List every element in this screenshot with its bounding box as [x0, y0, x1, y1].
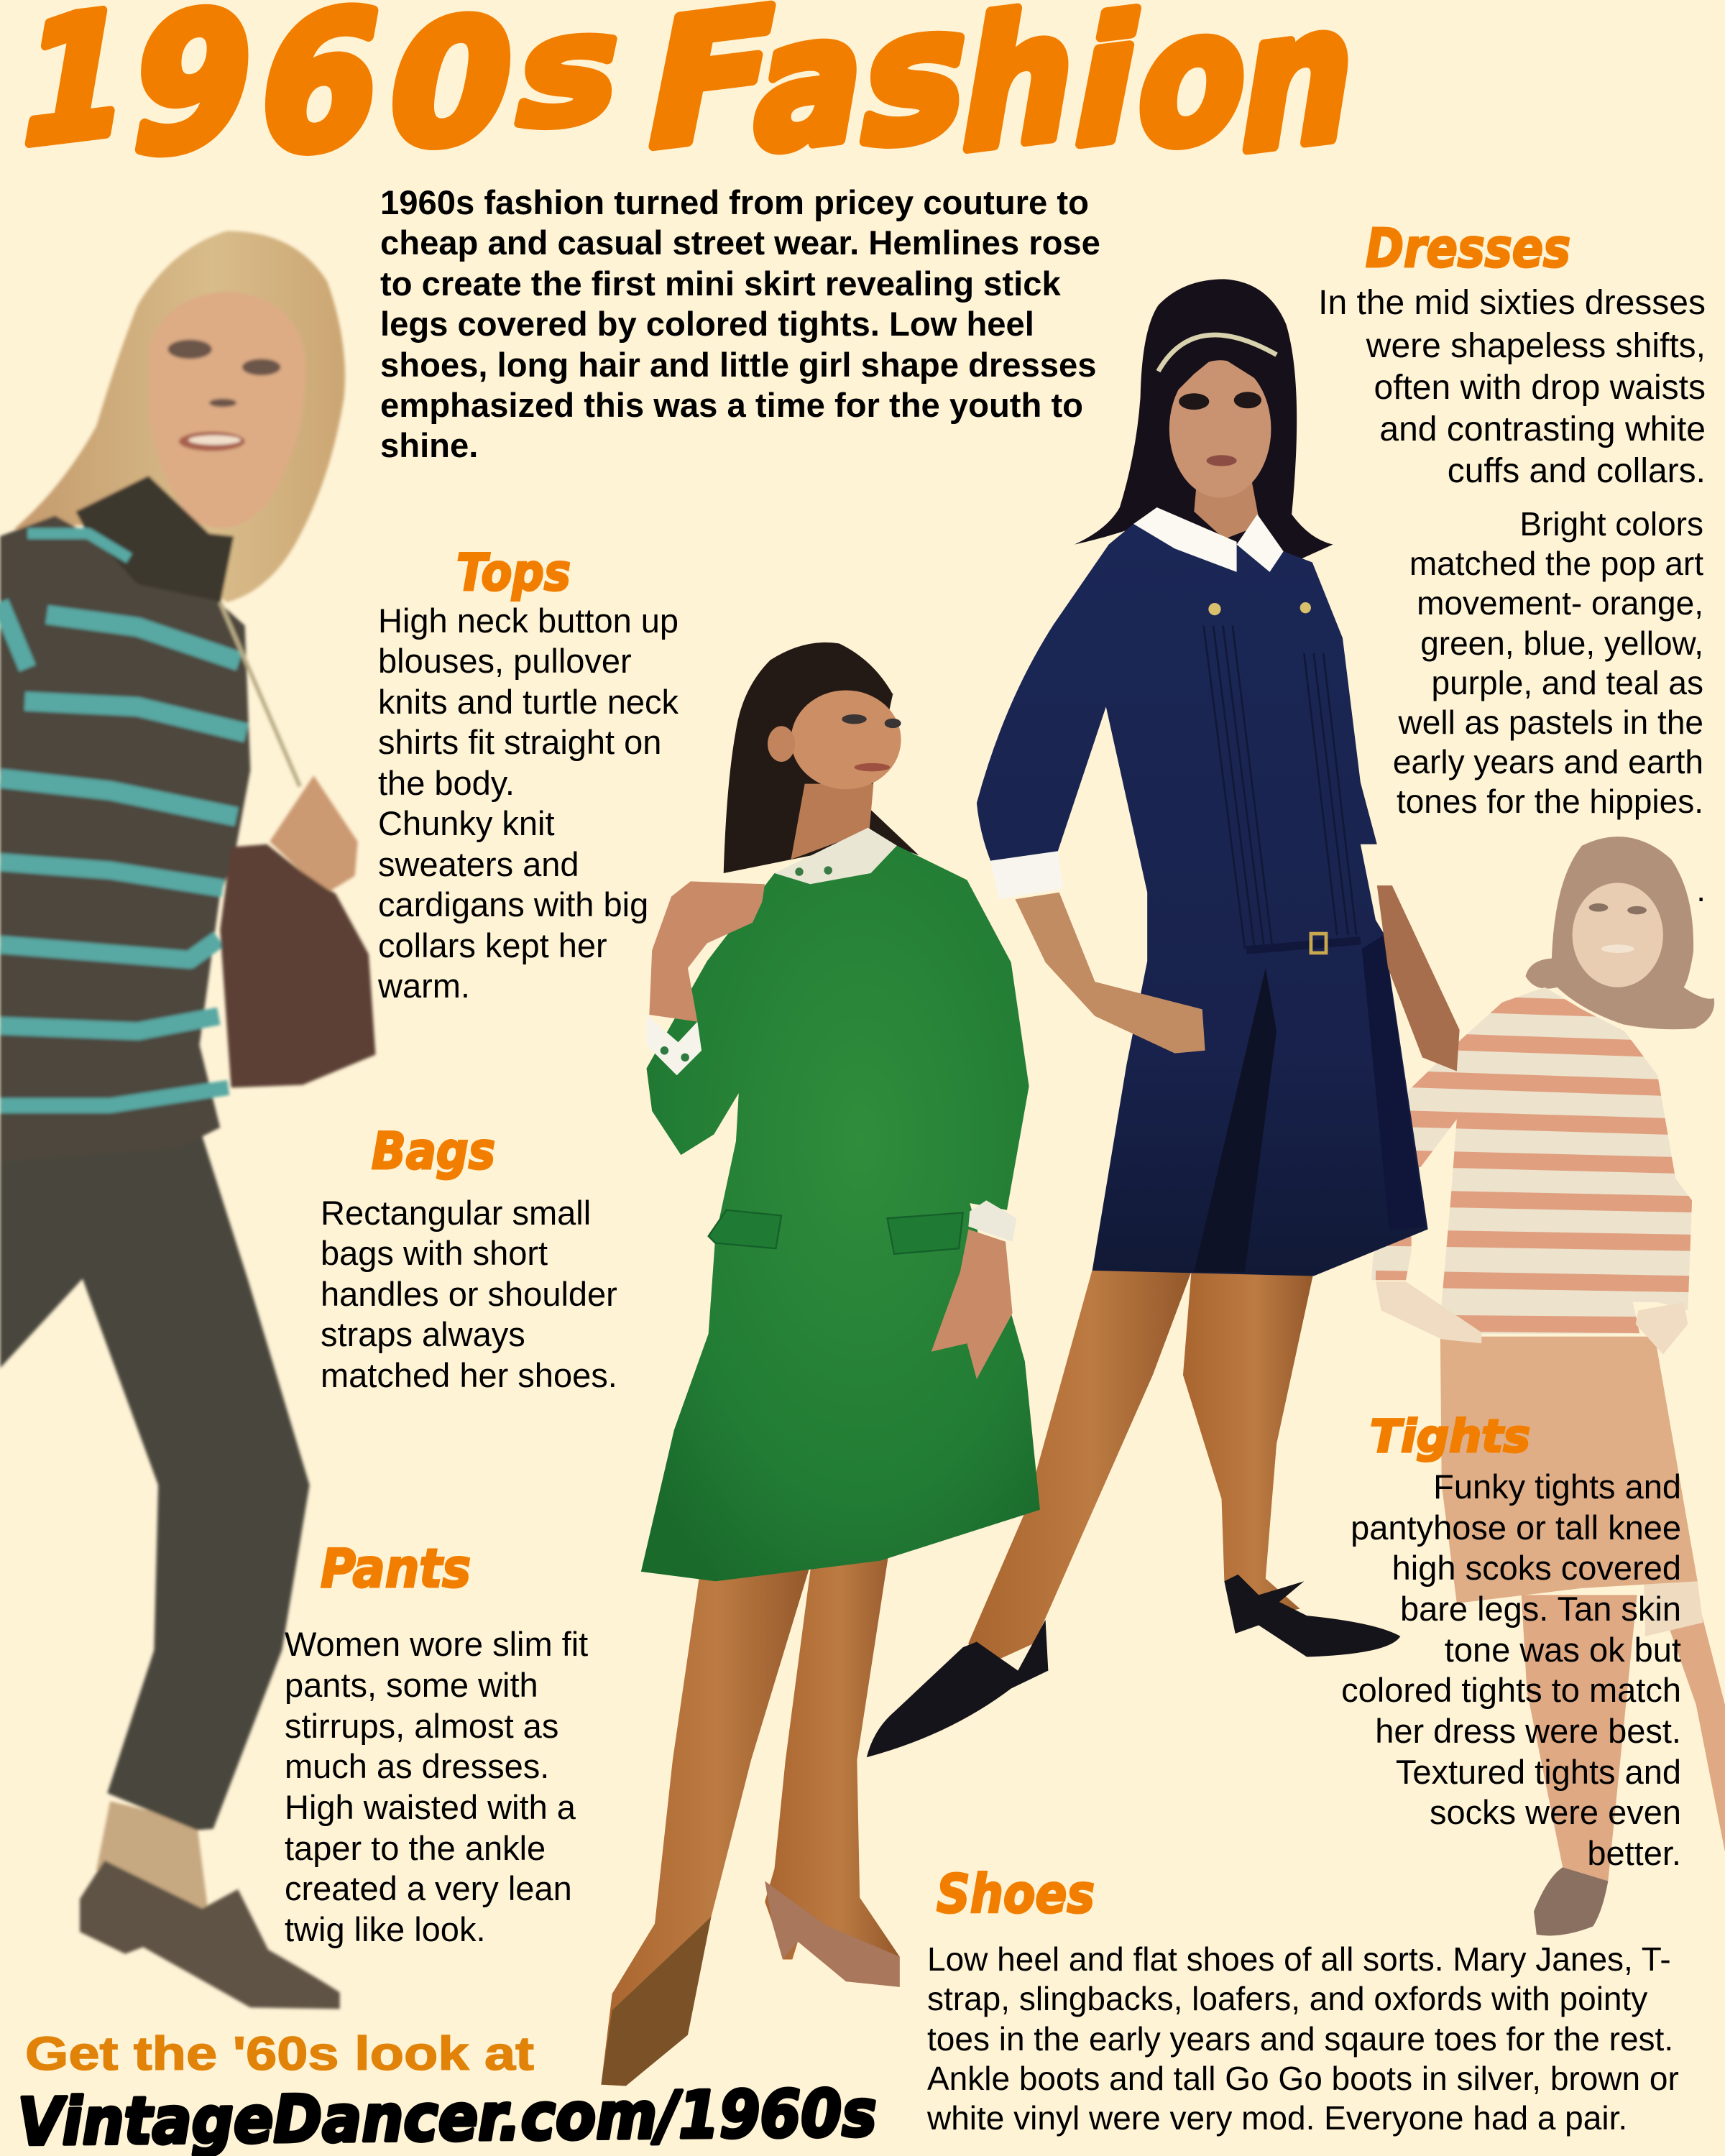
eyes, mouth	[842, 714, 901, 728]
legs	[1522, 1595, 1725, 1881]
heading: Pants: Pants	[321, 1538, 471, 1600]
hand	[270, 775, 358, 891]
face	[149, 292, 305, 528]
right cuff	[968, 1200, 1016, 1242]
text: Pants: pants, some with	[285, 1666, 538, 1704]
intro text: 1960s fashion turned from pricey couture to	[380, 184, 1089, 222]
collar	[1133, 507, 1284, 572]
dress	[977, 524, 1428, 1276]
text: Tights: Funky tights and	[1433, 1468, 1681, 1506]
heading: Dresses: Dresses	[1366, 218, 1570, 280]
dress	[641, 846, 1040, 1581]
text: Dresses paragraph 1: were shapeless shifts,	[1366, 327, 1706, 365]
dark shoe	[601, 1917, 711, 2086]
text: Bags: handles or shoulder	[321, 1275, 617, 1313]
eyes, lips	[1179, 392, 1261, 410]
text: Bags	[321, 1194, 617, 1394]
gold buttons	[1208, 602, 1311, 615]
hair	[1526, 837, 1714, 1029]
call to action: Get the '60s look at	[25, 2027, 534, 2080]
text: Pants: created a very lean	[285, 1869, 572, 1907]
text: Tights: better.	[1587, 1834, 1681, 1872]
teal stripes	[0, 533, 247, 1105]
photo: woman in green dress with white collar	[601, 642, 1040, 2086]
text: Pants: taper to the ankle	[285, 1829, 546, 1867]
ankle	[96, 1801, 209, 1918]
text: Tops: blouses, pullover	[378, 642, 632, 680]
face and neck	[1194, 482, 1260, 539]
hair	[724, 642, 919, 873]
text: Dresses paragraph 2: green, blue, yellow,	[1420, 625, 1703, 662]
text: Pants	[285, 1625, 588, 1948]
text: Dresses paragraph 2: .	[1696, 871, 1706, 908]
title	[23, 0, 1353, 196]
shoes	[867, 1575, 1400, 1757]
bag	[220, 844, 375, 1087]
text: Tops: collars kept her	[378, 926, 607, 964]
bangs	[1164, 330, 1279, 402]
text: Bags: Rectangular small	[321, 1194, 591, 1232]
text: Bags: straps always	[321, 1315, 525, 1353]
text: Dresses paragraph 1: In the mid sixties dresses	[1318, 284, 1706, 322]
text: Pants: twig like look.	[285, 1910, 486, 1948]
intro text	[380, 184, 1100, 465]
arms	[1015, 893, 1205, 1054]
text: Dresses paragraph 1: and contrasting white	[1379, 410, 1706, 448]
hands	[1376, 1281, 1688, 1355]
text: Dresses paragraph 2: matched the pop art	[1409, 545, 1703, 582]
text: Tights: bare legs. Tan skin	[1400, 1590, 1681, 1628]
text: Tights	[1341, 1468, 1681, 1872]
text: Dresses paragraph 2: Bright colors	[1519, 505, 1703, 543]
lower hand	[932, 1229, 1013, 1379]
text: Tops	[377, 602, 678, 1005]
text: Dresses paragraph 2: movement- orange,	[1417, 584, 1703, 622]
eyes, nose, mouth	[167, 340, 280, 407]
text: Dresses paragraph 2	[1393, 505, 1706, 908]
text: Tights: pantyhose or tall knee	[1351, 1508, 1681, 1547]
heading: Bags: Bags	[372, 1122, 495, 1181]
text: Dresses paragraph 1: cuffs and collars.	[1448, 452, 1706, 490]
text: Tops: the body.	[378, 764, 515, 802]
turtleneck	[75, 476, 234, 605]
text: Dresses paragraph 2: tones for the hippies.	[1397, 783, 1703, 820]
headband	[1159, 335, 1276, 372]
hair	[14, 231, 345, 602]
sweater	[0, 515, 250, 1162]
waist flaps	[709, 1210, 963, 1254]
text: Dresses paragraph 2: purple, and teal as	[1432, 664, 1703, 701]
text: Tights: socks were even	[1430, 1793, 1681, 1831]
raised hand	[649, 881, 765, 1022]
text: Tops: Chunky knit	[378, 804, 555, 842]
text: Bags: bags with short	[321, 1234, 548, 1272]
face and neck	[791, 784, 873, 860]
heading: Tops: Tops	[456, 543, 571, 602]
heading: Shoes: Shoes	[937, 1864, 1095, 1925]
text: Shoes: strap, slingbacks, loafers, and oxfords with pointy	[927, 1980, 1647, 2017]
shoe	[1534, 1867, 1608, 1935]
intro text: legs covered by colored tights. Low heel	[380, 305, 1034, 344]
intro text: to create the first mini skirt revealing stick	[380, 265, 1061, 303]
text: Tops: cardigans with big	[378, 885, 648, 923]
intro text: shoes, long hair and little girl shape dresses	[380, 346, 1096, 384]
text: Shoes: white vinyl were very mod. Everyone had a pair.	[926, 2099, 1627, 2137]
text: Shoes: Low heel and flat shoes of all sorts. Mary Janes, T-	[927, 1940, 1671, 1978]
photo: blonde woman in striped turtleneck with bag (faded)	[0, 231, 375, 2009]
text: Tights: high scoks covered	[1392, 1549, 1681, 1587]
bare knee	[1644, 1581, 1703, 1636]
text: Dresses paragraph 1	[1318, 284, 1706, 490]
hair	[1075, 279, 1333, 569]
text: Pants: much as dresses.	[285, 1747, 549, 1785]
text: Bags: matched her shoes.	[321, 1356, 617, 1394]
skirt	[1440, 1337, 1698, 1603]
bag strap	[220, 602, 300, 786]
cuff	[990, 851, 1063, 899]
sweater with stripes	[1371, 987, 1692, 1334]
text: Tights: Textured tights and	[1396, 1753, 1681, 1791]
text: Shoes	[926, 1940, 1679, 2137]
text: Shoes: Ankle boots and tall Go Go boots in silver, brown or	[927, 2060, 1679, 2097]
text: Tops: warm.	[377, 967, 470, 1005]
pintucks	[1204, 626, 1356, 949]
text: Tops: High neck button up	[378, 602, 678, 640]
text: Tights: colored tights to match	[1341, 1671, 1681, 1709]
photo: woman in orange striped sweater and skirt (faded)	[1362, 837, 1725, 1935]
face	[1573, 883, 1663, 987]
text: Tops: sweaters and	[378, 845, 579, 883]
intro text: shine.	[380, 427, 478, 465]
text: Dresses paragraph 2: early years and earth	[1393, 743, 1703, 780]
photo: woman in navy drop-waist dress	[867, 279, 1460, 1757]
legs and pink shoe	[601, 1561, 811, 2086]
intro text: cheap and casual street wear. Hemlines rose	[380, 224, 1100, 262]
text: Shoes: toes in the early years and sqaure toes for the rest.	[927, 2020, 1673, 2058]
pleat	[1194, 968, 1276, 1272]
belt and buckle	[1246, 941, 1361, 950]
pants	[0, 1128, 310, 1830]
text: Pants: stirrups, almost as	[285, 1707, 558, 1745]
heading: Tights: Tights	[1370, 1410, 1530, 1462]
text: Pants: Women wore slim fit	[285, 1625, 588, 1663]
text: Dresses paragraph 2: well as pastels in the	[1398, 704, 1703, 741]
text: Tops: knits and turtle neck	[378, 683, 678, 721]
ear	[768, 726, 795, 762]
text: Tights: her dress were best.	[1375, 1712, 1681, 1750]
text: Dresses paragraph 1: often with drop waists	[1374, 369, 1706, 407]
text: Tops: shirts fit straight on	[378, 723, 661, 761]
collar	[775, 828, 897, 884]
text: Tights: tone was ok but	[1445, 1631, 1681, 1669]
left cuff	[647, 1015, 702, 1075]
legs	[968, 1265, 1191, 1671]
intro text: emphasized this was a time for the youth to	[380, 387, 1083, 425]
shoe	[80, 1861, 340, 2009]
text: Pants: High waisted with a	[285, 1788, 576, 1826]
